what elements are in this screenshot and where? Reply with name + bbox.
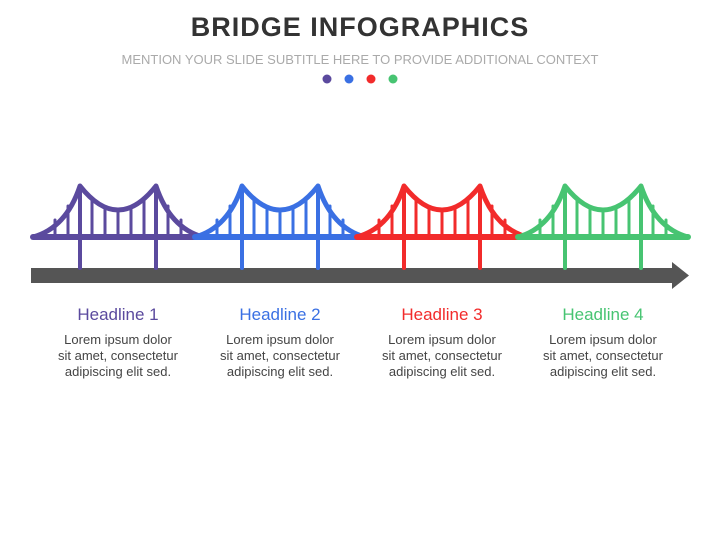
column 1: Headline 1 — [77, 305, 159, 324]
column 3 — [382, 305, 502, 379]
column 2: sit amet, consectetur — [220, 348, 340, 363]
subtitle: MENTION YOUR SLIDE SUBTITLE HERE TO PROVIDE ADDITIONAL CONTEXT — [122, 52, 598, 67]
column 1: sit amet, consectetur — [58, 348, 178, 363]
column 4: sit amet, consectetur — [543, 348, 663, 363]
bridge 3 — [357, 186, 527, 268]
column 2 — [220, 305, 340, 379]
column 3: Headline 3 — [401, 305, 483, 324]
column 2: Lorem ipsum dolor — [226, 332, 334, 347]
arrow — [31, 262, 689, 289]
column 1: Lorem ipsum dolor — [64, 332, 172, 347]
column 3: sit amet, consectetur — [382, 348, 502, 363]
title: BRIDGE INFOGRAPHICS — [191, 12, 529, 42]
column 2: adipiscing elit sed. — [227, 364, 333, 379]
column 4: Lorem ipsum dolor — [549, 332, 657, 347]
bridge 4 — [518, 186, 688, 268]
column 4 — [543, 305, 663, 379]
column 4: Headline 4 — [562, 305, 644, 324]
column 1: adipiscing elit sed. — [65, 364, 171, 379]
column 4: adipiscing elit sed. — [550, 364, 656, 379]
column 3: adipiscing elit sed. — [389, 364, 495, 379]
column 3: Lorem ipsum dolor — [388, 332, 496, 347]
column 1 — [58, 305, 178, 379]
bridge 2 — [195, 186, 365, 268]
bridge 1 — [33, 186, 203, 268]
column 2: Headline 2 — [239, 305, 321, 324]
